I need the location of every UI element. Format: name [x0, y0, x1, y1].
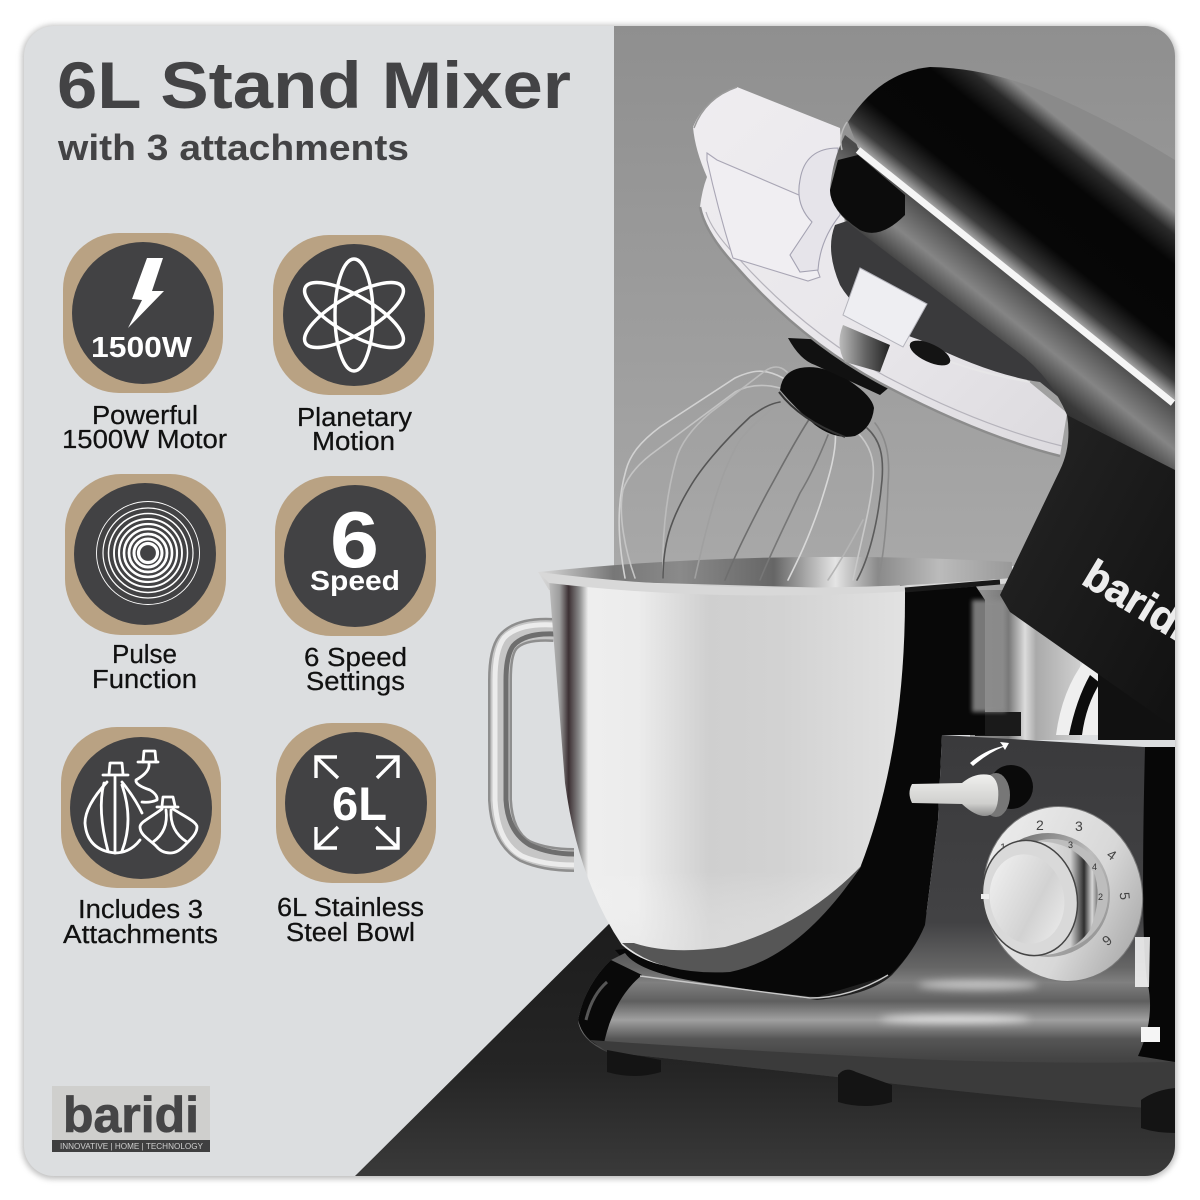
feature: pulse function: [65, 474, 226, 694]
label: [297, 404, 412, 456]
icon: atom orbits: [296, 259, 412, 371]
label: Pulse: [112, 641, 177, 669]
base highlights: [880, 1015, 1030, 1023]
tilt lever: [994, 765, 1033, 809]
title: [58, 60, 570, 160]
glossy right side: [1138, 747, 1175, 1062]
label: 6 Speed: [304, 644, 407, 672]
label: Planetary: [297, 404, 412, 432]
feature: 6L bowl: [276, 723, 436, 947]
stand controls: 4: [1092, 862, 1097, 872]
whisk wires: [619, 367, 889, 580]
stand base and panel: [578, 735, 1175, 1110]
icon text: 1500W: 1500W: [91, 332, 193, 364]
stand controls: 3: [1068, 840, 1073, 850]
label: Attachments: [63, 921, 218, 949]
title: 6L Stand Mixer: [57, 48, 571, 122]
label: [63, 896, 218, 949]
chrome strip: [858, 150, 1173, 403]
whisk hub: [779, 338, 892, 437]
stand controls: 3: [1075, 818, 1083, 834]
stand controls: 5: [1117, 891, 1133, 901]
cradle line: [640, 975, 888, 998]
tilt arrow: [970, 742, 1009, 766]
icon: lightning bolt: [128, 258, 164, 328]
label: 6L Stainless: [277, 894, 424, 922]
lower head: [830, 135, 1175, 470]
label: [64, 404, 227, 448]
label: Function: [92, 666, 197, 694]
brand logo: INNOVATIVE | HOME | TECHNOLOGY: [60, 1141, 203, 1151]
icon: whisk, hook, beater: [85, 751, 197, 853]
motor head: [830, 67, 1175, 470]
upper shell: [848, 67, 1175, 400]
lower lip: [590, 1040, 1175, 1110]
tilting arm with logo: [1000, 415, 1175, 674]
feet: [607, 1050, 1175, 1133]
stand controls: 4: [1104, 846, 1120, 863]
label: [92, 641, 197, 694]
icon text: 6: 6: [330, 495, 379, 584]
subtitle: with 3 attachments: [57, 127, 409, 168]
dark ring behind lid: [831, 210, 1062, 400]
feature: 6 speed: [275, 476, 436, 696]
panel: dark floor wedge: [355, 913, 1175, 1176]
transparent splash guard: [693, 87, 1067, 456]
feature: powerful motor: [62, 233, 228, 454]
stainless steel bowl: [538, 572, 1012, 972]
icon text: Speed: Speed: [310, 565, 400, 596]
icon text: 6L: 6L: [332, 777, 387, 830]
label: 1500W Motor: [62, 426, 228, 454]
label: Motion: [312, 428, 395, 456]
bowl reflection column: [972, 600, 1006, 712]
bowl interior: [538, 557, 1012, 590]
stand controls: 6: [1085, 923, 1090, 933]
panel: grey right background: [614, 26, 1175, 566]
stand controls: 2: [1036, 817, 1044, 833]
mixer photo illustration: [495, 67, 1198, 1133]
stand controls: 6: [1099, 932, 1115, 949]
label: Powerful: [92, 402, 198, 430]
label: Settings: [306, 668, 405, 696]
arm logo: baridi: [1075, 550, 1198, 650]
feature: planetary motion: [273, 235, 434, 456]
stand controls: 1: [1000, 842, 1006, 854]
feature: attachments: [61, 727, 221, 949]
glossy left cap: [578, 960, 642, 1048]
lid clip: [843, 268, 927, 347]
bowl handle: [495, 625, 574, 865]
chute: [707, 153, 830, 281]
label: Includes 3: [78, 896, 203, 924]
icon: concentric rings: [96, 502, 200, 604]
label: [304, 644, 407, 696]
label: Steel Bowl: [286, 919, 415, 947]
brand logo: baridi: [63, 1087, 199, 1143]
icon: expanding arrows: [316, 757, 398, 848]
label: [277, 894, 424, 947]
stand controls: [910, 742, 1144, 982]
speed dial: [984, 806, 1144, 982]
stand controls: 2: [1098, 892, 1103, 902]
stand body: [615, 585, 985, 997]
column behind the bowl: [970, 590, 1178, 740]
